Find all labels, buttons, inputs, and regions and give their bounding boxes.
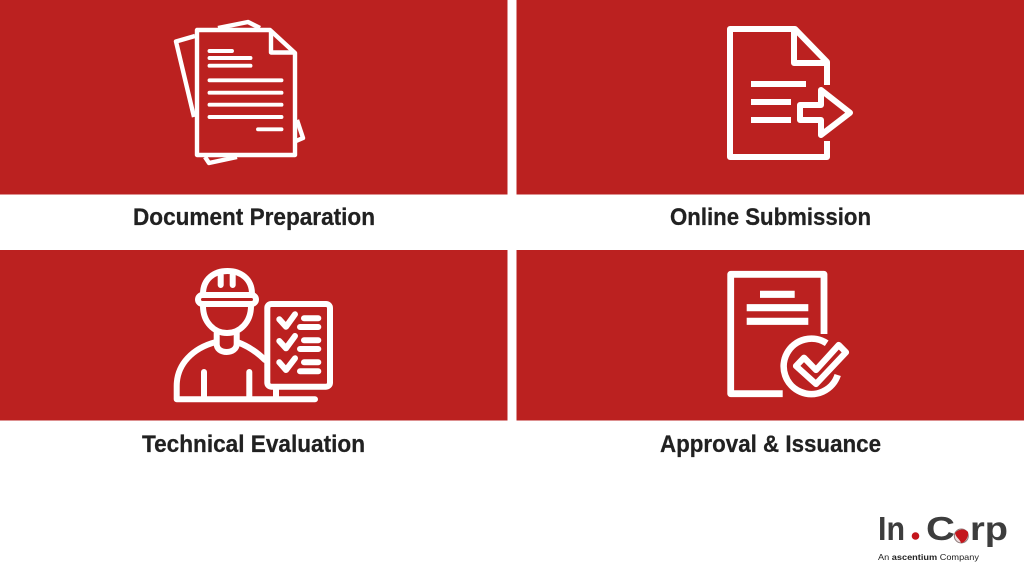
panel: document preparation — [0, 0, 508, 194]
icon: document with arrow — [730, 29, 850, 157]
heading: Technical Evaluation: Technical Evaluation — [142, 431, 365, 458]
logo: InCorp: rp — [970, 510, 1008, 547]
logo: InCorp: C — [926, 510, 955, 547]
icon: stacked documents — [176, 22, 303, 163]
panel: online submission — [516, 0, 1024, 194]
heading: Online Submission: Online Submission — [670, 204, 871, 231]
heading: Approval & Issuance: Approval & Issuance — [660, 431, 881, 458]
logo: InCorp — [878, 510, 1008, 562]
panel: technical evaluation — [0, 250, 508, 420]
heading: Document Preparation: Document Preparation — [133, 204, 375, 231]
logo: InCorp: An ascentium Company — [878, 552, 980, 562]
icon: approved document — [731, 274, 846, 394]
logo: InCorp: In — [878, 510, 905, 547]
icon: engineer with checklist — [177, 271, 330, 399]
panel: approval and issuance — [516, 250, 1024, 420]
